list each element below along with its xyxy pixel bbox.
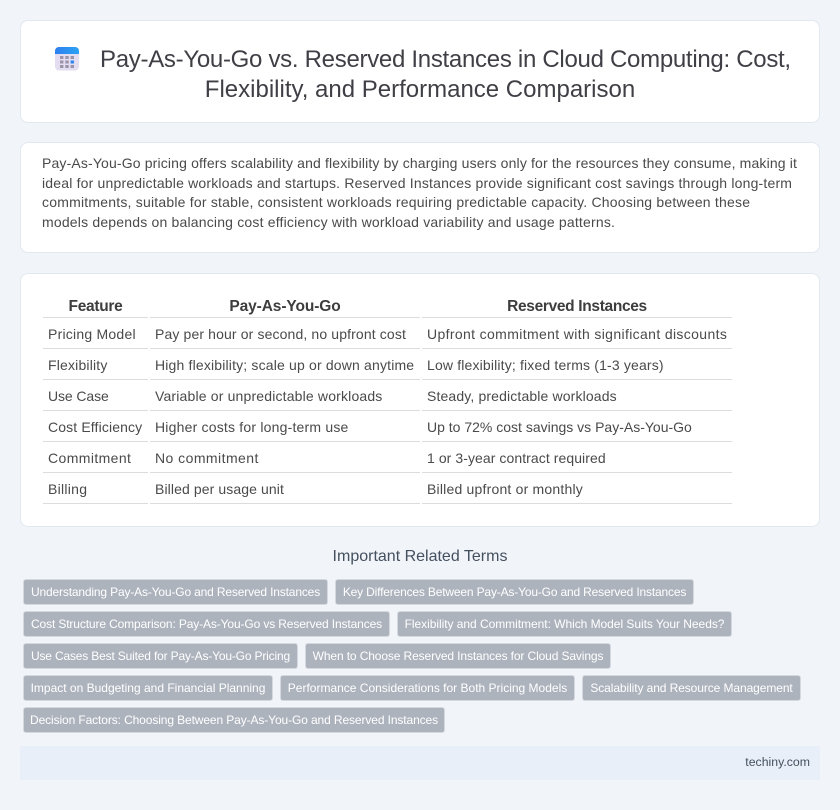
row: billing: Billing: [48, 481, 87, 497]
chip: When to Choose Reserved Instances for Cloud Savings: [313, 649, 603, 663]
chip: Performance Considerations for Both Pricing Models: [288, 681, 567, 695]
row: pricing model: Pricing Model: [48, 326, 136, 342]
chip: Key Differences Between Pay-As-You-Go and Reserved Instances: [343, 585, 686, 599]
comparison table: Pay per hour or second, no upfront cost: [155, 326, 406, 342]
chip: [335, 579, 694, 605]
row: commitment: Commitment: [48, 450, 131, 466]
comparison table: Billed upfront or monthly: [427, 481, 583, 497]
comparison table: No commitment: [155, 450, 259, 466]
chip: [280, 675, 575, 701]
chip: Understanding Pay-As-You-Go and Reserved Instances: [31, 585, 320, 599]
chip: Cost Structure Comparison: Pay-As-You-Go vs Reserved Instances: [31, 617, 382, 631]
header: Reserved Instances: Reserved Instances: [507, 298, 647, 315]
chip: Use Cases Best Suited for Pay-As-You-Go Pricing: [31, 649, 290, 663]
comparison table: Upfront commitment with significant discounts: [427, 326, 727, 342]
footer bar: [20, 746, 820, 780]
panel: comparison table: [20, 273, 820, 527]
comparison table: Higher costs for long-term use: [155, 419, 349, 435]
row: cost efficiency: Cost Efficiency: [48, 419, 142, 435]
intro text: [42, 155, 797, 230]
comparison table: Low flexibility; fixed terms (1-3 years): [427, 357, 664, 373]
comparison table: Up to 72% cost savings vs Pay-As-You-Go: [427, 419, 692, 435]
comparison table: High flexibility; scale up or down anytime: [155, 357, 414, 373]
comparison table: Billed per usage unit: [155, 481, 284, 497]
chip: [23, 579, 328, 605]
chip: Decision Factors: Choosing Between Pay-As-You-Go and Reserved Instances: [30, 713, 438, 727]
chip: Impact on Budgeting and Financial Planning: [31, 681, 265, 695]
heading: related terms: Important Related Terms: [333, 548, 507, 565]
chip: Flexibility and Commitment: Which Model Suits Your Needs?: [405, 617, 724, 631]
icon: calendar: [55, 47, 79, 70]
footer source: techiny.com: [745, 755, 810, 769]
intro text: ideal for unpredictable workloads and startups. Reserved Instances provide significant cost savings through long-term: [42, 174, 792, 190]
panel: introduction: [20, 142, 820, 253]
chip: [23, 643, 298, 669]
chip: [397, 611, 732, 637]
title: Flexibility, and Performance Comparison: [205, 76, 635, 103]
title: Pay-As-You-Go vs. Reserved Instances in Cloud Computing: Cost,: [100, 46, 791, 73]
related term chips: [23, 579, 801, 733]
chip: Scalability and Resource Management: [590, 681, 793, 695]
chip: [23, 707, 445, 733]
intro text: models depends on balancing cost efficiency with workload variability and usage patterns.: [42, 214, 615, 230]
chip: [23, 611, 390, 637]
header: Feature: Feature: [69, 298, 122, 315]
row: flexibility: Flexibility: [48, 357, 108, 373]
title: [100, 46, 791, 103]
chip: [305, 643, 611, 669]
row: use case: Use Case: [48, 388, 109, 404]
comparison table: Steady, predictable workloads: [427, 388, 617, 404]
intro text: Pay-As-You-Go pricing offers scalability and flexibility by charging users only for the resources they consume, making it: [42, 155, 797, 171]
comparison table: Variable or unpredictable workloads: [155, 388, 382, 404]
title panel: [20, 20, 820, 123]
header: Pay-As-You-Go: Pay-As-You-Go: [229, 298, 341, 315]
chip: [23, 675, 273, 701]
comparison table: [43, 298, 732, 504]
chip: [582, 675, 801, 701]
intro text: commitments, suitable for stable, consistent workloads requiring predictable capacity. Choosing between these: [42, 194, 750, 210]
comparison table: 1 or 3-year contract required: [427, 450, 606, 466]
